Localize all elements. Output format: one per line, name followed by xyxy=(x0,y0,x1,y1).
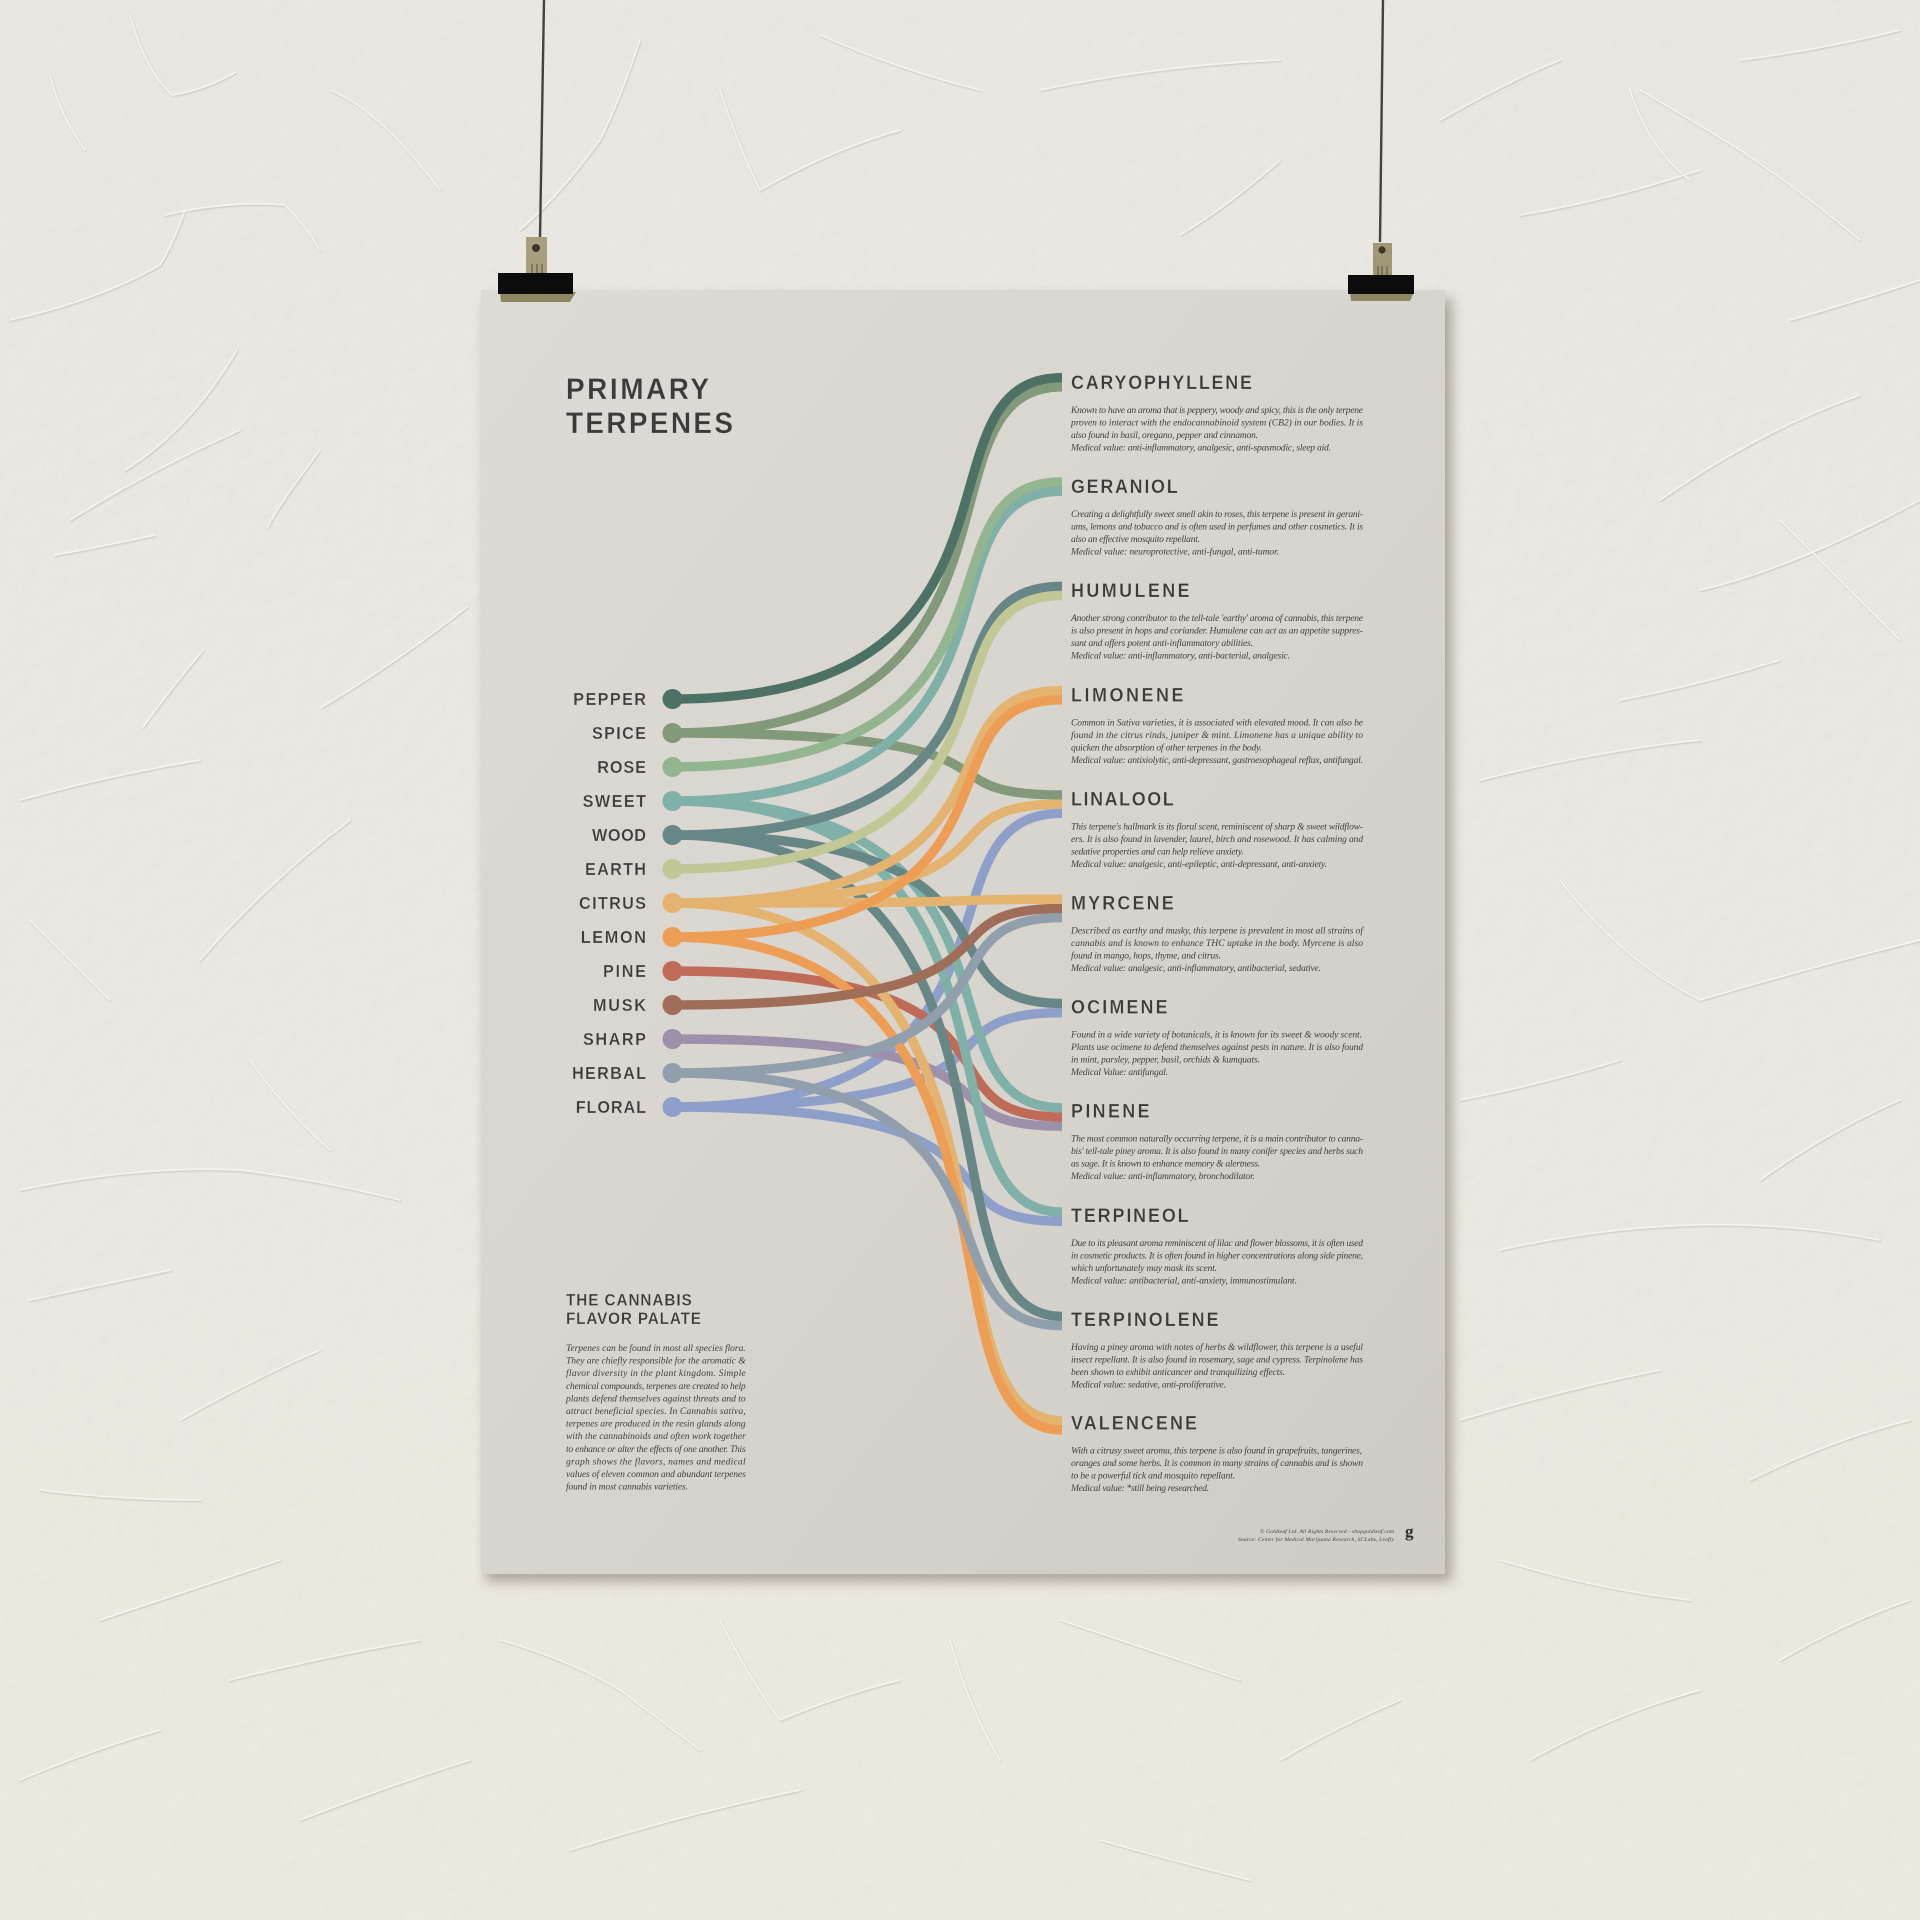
intro paragraph: Terpenes can be found in most all species flora. xyxy=(566,1343,746,1354)
flavor labels: LEMON xyxy=(581,927,646,947)
flavor labels xyxy=(572,689,647,1117)
intro paragraph: terpenes are produced in the resin glands along xyxy=(566,1419,746,1430)
description: in mint, parsley, pepper, basil, orchids & kumquats. xyxy=(1071,1055,1260,1066)
heading: CARYOPHYLLENE xyxy=(1071,371,1252,393)
description: Medical value: antibacterial, anti-anxiety, immunostimulant. xyxy=(1070,1275,1297,1286)
description: Described as earthy and musky, this terpene is prevalent in most all strains of xyxy=(1070,926,1364,936)
description: Medical value: anti-inflammatory, bronchodilator. xyxy=(1070,1171,1255,1182)
title: TERPENES xyxy=(566,407,733,440)
flavor labels: PEPPER xyxy=(573,689,646,709)
description: insect repellant. It is also found in rosemary, sage and cypress. Terpinolene has xyxy=(1071,1354,1363,1365)
description: Medical value: sedative, anti-proliferative. xyxy=(1070,1379,1226,1390)
description: ers. It is also found in lavender, laurel, birch and rosewood. It has calming and xyxy=(1071,834,1363,845)
description: cannabis and is known to enhance THC uptake in the body. Myrcene is also xyxy=(1071,938,1363,949)
wood flows xyxy=(672,586,1062,1316)
flavor labels: CITRUS xyxy=(579,893,646,913)
panel: Terpinolene xyxy=(1070,1308,1363,1390)
description xyxy=(1070,613,1364,662)
description xyxy=(1070,1030,1363,1078)
description: Medical value: anti-inflammatory, anti-bacterial, analgesic. xyxy=(1070,651,1290,662)
description: Due to its pleasant aroma reminiscent of lilac and flower blossoms, it is often used xyxy=(1070,1238,1363,1249)
heading: LIMONENE xyxy=(1071,684,1184,705)
flavor labels: SHARP xyxy=(583,1029,646,1049)
left clip and wire xyxy=(498,0,576,302)
flavor nodes xyxy=(662,689,682,1117)
flavor labels: WOOD xyxy=(592,825,646,845)
herbal flows xyxy=(672,918,1062,1326)
heading: OCIMENE xyxy=(1071,996,1168,1018)
flavor labels: HERBAL xyxy=(572,1063,646,1083)
heading: TERPINOLENE xyxy=(1071,1308,1219,1330)
intro paragraph: graph shows the flavors, names and medical xyxy=(566,1456,746,1467)
description xyxy=(1070,926,1364,974)
poster sheet xyxy=(481,290,1445,1574)
intro paragraph: flavor diversity in the plant kingdom. Simple xyxy=(566,1368,746,1379)
description: which unfortunately may mask its scent. xyxy=(1071,1263,1217,1274)
description xyxy=(1070,1342,1363,1390)
description: With a citrusy sweet aroma, this terpene is also found in grapefruits, tangerines, xyxy=(1071,1446,1362,1457)
heading: MYRCENE xyxy=(1071,892,1174,914)
panel: Myrcene xyxy=(1070,892,1364,974)
description: Creating a delightfully sweet smell akin to roses, this terpene is present in gerani- xyxy=(1071,509,1363,520)
footer credits xyxy=(1238,1528,1395,1543)
title xyxy=(566,373,733,440)
intro paragraph: found in most cannabis varieties. xyxy=(566,1482,688,1493)
panel: Valencene xyxy=(1070,1412,1363,1494)
description: Plants use ocimene to defend themselves against pests in nature. It is also found xyxy=(1070,1042,1363,1053)
flavor labels: MUSK xyxy=(593,995,647,1015)
description: oranges and some herbs. It is common in many strains of cannabis and is shown xyxy=(1071,1458,1363,1469)
panel: Limonene xyxy=(1070,684,1364,766)
description: Medical value: *still being researched. xyxy=(1070,1483,1209,1494)
description xyxy=(1070,405,1364,454)
panel: The Cannabis Flavor Palate xyxy=(565,1292,746,1493)
intro paragraph: attract beneficial species. In Cannabis sativa, xyxy=(566,1406,746,1417)
description: bis' tell-tale piney aroma. It is also found in many conifer species and herbs such xyxy=(1071,1146,1363,1157)
lemon flow to Limonene xyxy=(672,700,1062,937)
flavor labels: ROSE xyxy=(597,757,646,777)
description: is also present in hops and coriander. Humulene can act as an appetite suppres- xyxy=(1071,626,1363,637)
footer credits: © Goldleaf Ltd. All Rights Reserved - shopgoldleaf.com xyxy=(1260,1528,1394,1535)
heading: VALENCENE xyxy=(1071,1412,1197,1434)
description: Found in a wide variety of botanicals, it is known for its sweet & woody scent. xyxy=(1070,1030,1362,1041)
pine flow xyxy=(672,971,1062,1117)
intro paragraph: plants defend themselves against threats and to xyxy=(565,1393,746,1404)
flavor labels: SPICE xyxy=(592,723,646,743)
description: proven to interact with the endocannabinoid system (CB2) in our bodies. It is xyxy=(1070,418,1363,428)
poster shadow xyxy=(486,298,1452,1582)
description: sant and offers potent anti-inflammatory abilities. xyxy=(1071,638,1253,649)
description: Medical value: antixiolytic, anti-depressant, gastroesophageal reflux, antifungal. xyxy=(1070,755,1363,766)
intro paragraph: They are chiefly responsible for the aromatic & xyxy=(566,1356,746,1367)
logo: g: g xyxy=(1405,1522,1414,1541)
description: found in the citrus rinds, juniper & mint. Limonene has a unique ability to xyxy=(1071,730,1363,741)
description: also found in basil, oregano, pepper and cinnamon. xyxy=(1071,430,1258,441)
description: Common in Sativa varieties, it is associated with elevated mood. It can also be xyxy=(1071,717,1364,728)
description: as sage. It is known to enhance memory & alertness. xyxy=(1071,1159,1260,1170)
description: in cosmetic products. It is often found in higher concentrations along side pinene, xyxy=(1071,1250,1363,1261)
panel: Geraniol xyxy=(1070,475,1363,558)
rose flow xyxy=(672,482,1062,767)
flavor labels: FLORAL xyxy=(576,1097,646,1117)
pepper flow xyxy=(672,378,1062,699)
title: PRIMARY xyxy=(566,373,709,406)
intro paragraph: to enhance or alter the effects of one another. This xyxy=(566,1444,746,1455)
intro paragraph: values of eleven common and abundant terpenes xyxy=(566,1469,746,1480)
chart: flavor to terpene flow lines xyxy=(672,378,1062,1430)
description: Medical value: neuroprotective, anti-fungal, anti-tumor. xyxy=(1070,547,1279,558)
heading: GERANIOL xyxy=(1071,475,1178,497)
subheading: FLAVOR PALATE xyxy=(566,1311,701,1328)
panel: Linalool xyxy=(1070,788,1363,870)
description: Known to have an aroma that is peppery, woody and spicy, this is the only terpene xyxy=(1070,405,1364,416)
description xyxy=(1070,1134,1363,1182)
description: Another strong contributor to the tell-tale 'earthy' aroma of cannabis, this terpene xyxy=(1070,613,1364,624)
flavor labels: EARTH xyxy=(585,859,646,879)
panel: Pinene xyxy=(1070,1100,1363,1182)
description: to be a powerful tick and mosquito repellant. xyxy=(1071,1471,1235,1482)
earth flow xyxy=(672,596,1062,869)
musk flow xyxy=(672,908,1062,1005)
sweet flows xyxy=(672,491,1062,1212)
spice flow to Linalool xyxy=(672,733,1062,795)
sharp flow xyxy=(672,1039,1062,1126)
description: Having a piney aroma with notes of herbs & wildflower, this terpene is a useful xyxy=(1070,1342,1363,1353)
heading: LINALOOL xyxy=(1071,788,1174,810)
citrus flows to Linalool, Myrcene, Limonene xyxy=(672,691,1062,903)
intro paragraph: with the cannabinoids and often work together xyxy=(566,1431,746,1442)
description: Medical value: anti-inflammatory, analgesic, anti-spasmodic, sleep aid. xyxy=(1070,442,1331,454)
description xyxy=(1070,821,1363,870)
description xyxy=(1070,1446,1363,1494)
subheading: THE CANNABIS xyxy=(566,1292,692,1310)
citrus and lemon flows into Valencene xyxy=(672,903,1062,1430)
description: Medical value: analgesic, anti-inflammatory, antibacterial, sedative. xyxy=(1070,963,1321,974)
flavor labels: SWEET xyxy=(583,791,647,811)
description xyxy=(1070,1238,1363,1286)
right clip and wire xyxy=(1348,0,1414,301)
description xyxy=(1070,717,1364,766)
panel: Caryophyllene xyxy=(1070,371,1364,454)
heading: TERPINEOL xyxy=(1071,1204,1189,1226)
footer credits: Source: Center for Medical Marijuana Research, SCLabs, Leafly xyxy=(1238,1536,1395,1543)
description: Medical value: analgesic, anti-epileptic, anti-depressant, anti-anxiety. xyxy=(1070,859,1327,870)
description: found in mango, hops, thyme, and citrus. xyxy=(1071,950,1221,962)
description: The most common naturally occurring terpene, it is a main contributor to canna- xyxy=(1071,1134,1363,1145)
panel: Ocimene xyxy=(1070,996,1363,1078)
spice flow to Caryophyllene xyxy=(672,387,1062,733)
panel: Humulene xyxy=(1070,580,1364,662)
panel: Terpineol xyxy=(1070,1204,1363,1286)
floral flows xyxy=(672,813,1062,1221)
heading: HUMULENE xyxy=(1071,580,1190,601)
description: been shown to exhibit anticancer and tranquilizing effects. xyxy=(1071,1367,1285,1378)
description xyxy=(1070,509,1363,558)
description: ums, lemons and tobacco and is often used in perfumes and other cosmetics. It is xyxy=(1071,522,1363,533)
description: sedative properties and can help relieve anxiety. xyxy=(1071,846,1244,857)
flavor labels: PINE xyxy=(603,961,646,981)
intro paragraph: chemical compounds, terpenes are created to help xyxy=(566,1381,746,1392)
description: This terpene's hallmark is its floral scent, reminiscent of sharp & sweet wildflow- xyxy=(1071,821,1363,832)
description: Medical Value: antifungal. xyxy=(1070,1067,1168,1078)
description: quicken the absorption of other terpenes in the body. xyxy=(1071,742,1262,753)
heading: PINENE xyxy=(1071,1100,1150,1122)
intro paragraph xyxy=(565,1343,746,1493)
description: also an effective mosquito repellant. xyxy=(1071,534,1200,545)
subheading xyxy=(566,1292,701,1328)
